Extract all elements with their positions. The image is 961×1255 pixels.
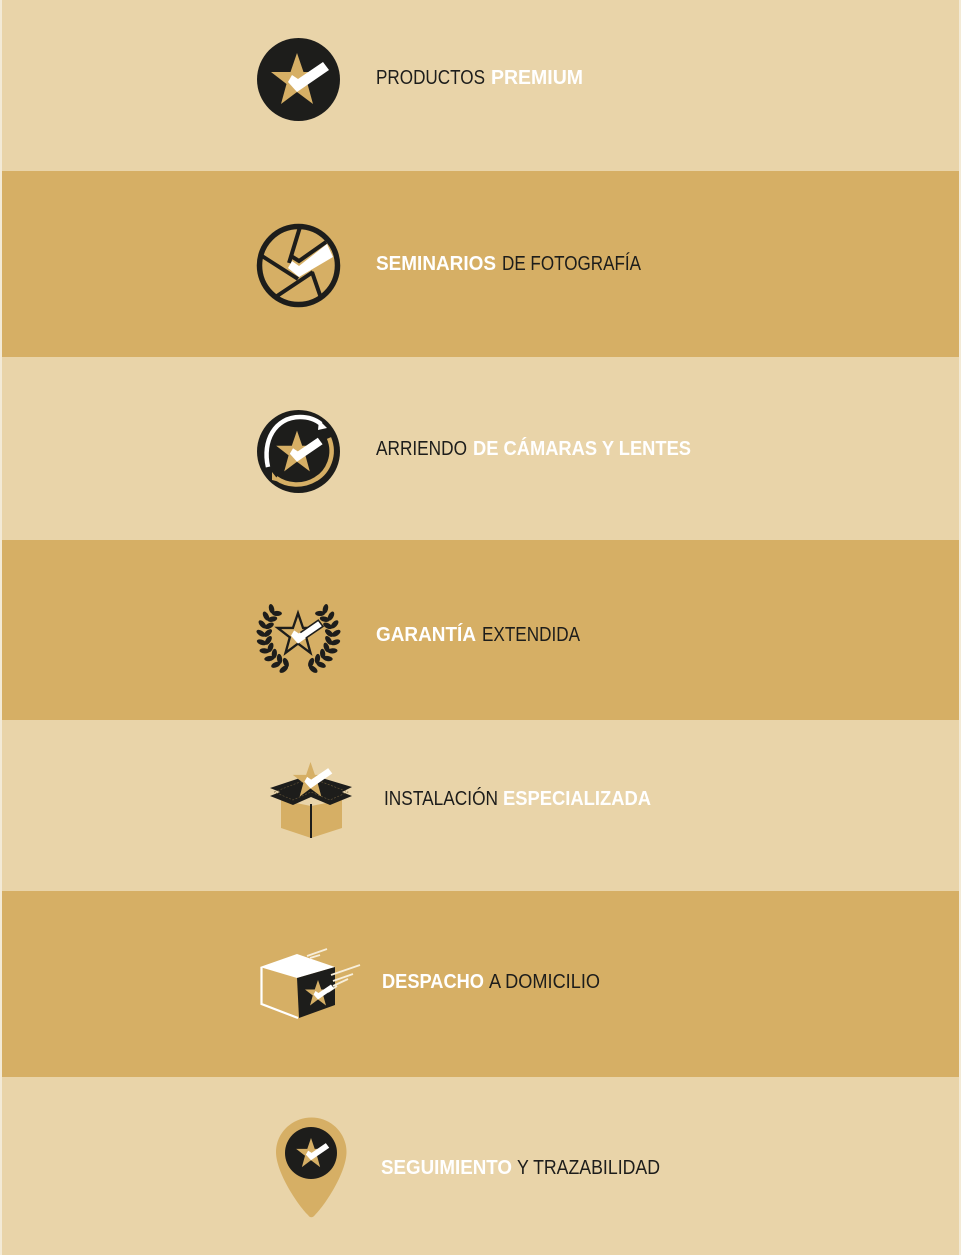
label: ARRIENDO [376,438,467,460]
label: SEGUIMIENTO [381,1157,512,1179]
icon: premium star badge [257,38,340,121]
label: PRODUCTOS [376,67,485,89]
row: seguimiento y trazabilidad [2,1077,959,1255]
label [376,623,581,646]
label: GARANTÍA [376,623,476,646]
band [2,891,959,1077]
label [376,67,583,89]
label: DE CÁMARAS Y LENTES [473,437,691,460]
label: EXTENDIDA [482,624,581,646]
icon: open box with star [270,762,352,838]
label: INSTALACIÓN [384,787,498,810]
row: arriendo de camaras y lentes [2,357,959,540]
label [382,971,600,993]
band [2,171,959,357]
label [381,1157,660,1179]
row: despacho a domicilio [2,891,959,1077]
band [2,540,959,720]
label: DE FOTOGRAFÍA [502,252,642,275]
label: PREMIUM [491,67,583,89]
row: seminarios de fotografia [2,171,959,357]
row: garantia extendida [2,540,959,720]
icon: laurel wreath star [255,601,342,676]
icon: moving delivery box [260,949,360,1018]
icon: camera aperture [260,226,338,304]
row: productos premium [2,0,959,171]
label: ESPECIALIZADA [503,788,651,810]
label [376,252,642,275]
label: DESPACHO [382,971,484,993]
band [2,357,959,540]
row: instalacion especializada [2,720,959,891]
band [2,1077,959,1255]
band [2,0,959,171]
label [376,437,691,460]
icon: rental cycle [257,410,340,493]
icon: location pin [276,1118,346,1217]
label: SEMINARIOS [376,253,496,275]
band [2,720,959,891]
label: A DOMICILIO [489,971,600,993]
label [384,787,651,810]
label: Y TRAZABILIDAD [517,1157,660,1179]
